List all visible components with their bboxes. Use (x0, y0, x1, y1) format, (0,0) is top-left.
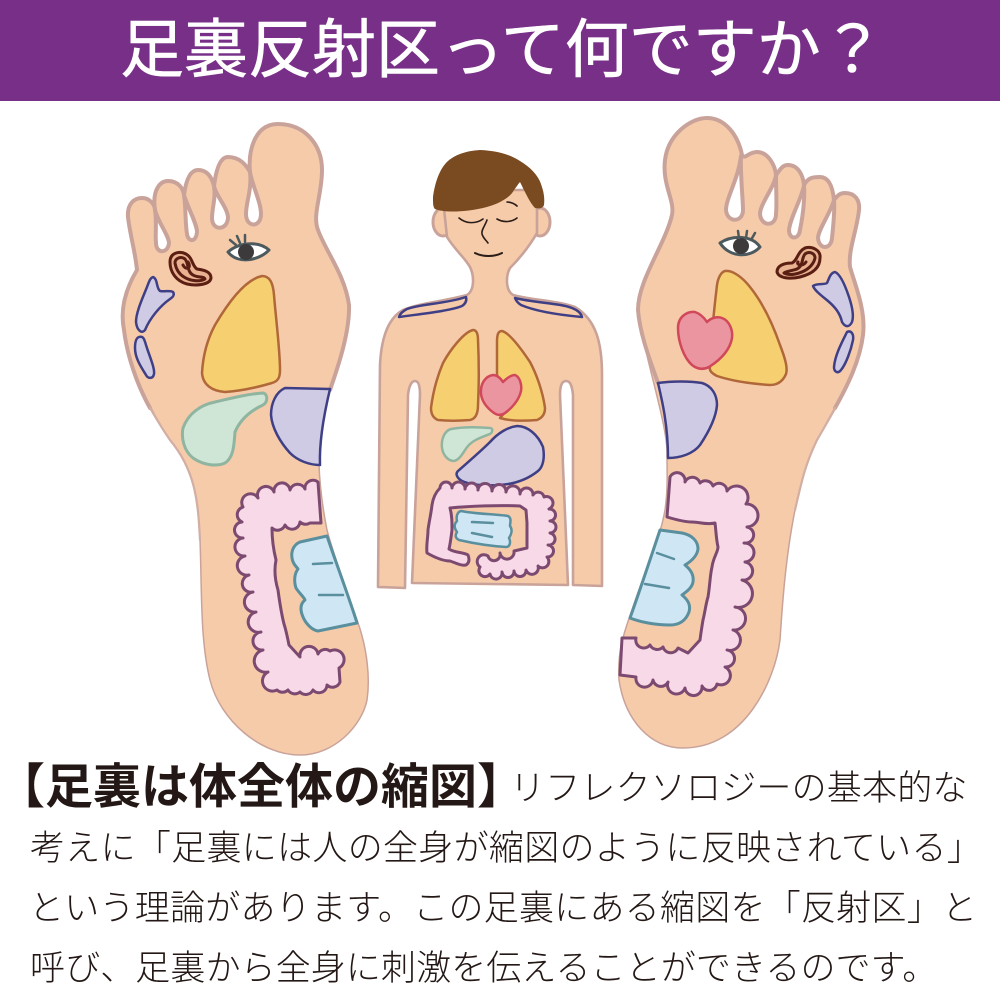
ears (433, 208, 550, 236)
colon (427, 482, 556, 579)
right foot arch contour (795, 408, 835, 510)
left thyroid (136, 277, 174, 332)
left shoulder reflex (135, 337, 154, 378)
left lung (202, 276, 280, 392)
left stomach (271, 388, 330, 465)
left foot upper contour (123, 124, 349, 408)
heart (481, 375, 521, 415)
left toe gaps (155, 172, 261, 251)
right ear (777, 247, 820, 278)
right shoulder reflex (834, 331, 853, 372)
title: 足裏反射区って何ですか？ (120, 14, 885, 86)
title banner (0, 0, 1000, 101)
right eye (720, 231, 760, 255)
left collarbone (399, 297, 466, 317)
left foot outline (123, 124, 368, 755)
text line 4: 呼び、足裏から全身に刺激を伝えることができるのです。 (30, 949, 937, 988)
right foot outline (619, 118, 864, 748)
text line 1 with bold heading: リフレクソロジーの基本的な (510, 769, 968, 808)
right heart (678, 312, 732, 369)
left ear (170, 253, 211, 285)
hair (433, 150, 544, 212)
text line 1 with bold heading (0, 761, 968, 814)
person with internal organs (378, 150, 602, 588)
text line 2: 考えに「足裏には人の全身が縮図のように反映されている」 (30, 829, 982, 868)
right lung (710, 271, 787, 385)
small intestine (455, 511, 512, 547)
right foot (619, 118, 864, 748)
text line 1 with bold heading: 【足裏は体全体の縮図】 (0, 761, 525, 814)
right toe gaps (726, 156, 834, 247)
right thyroid (813, 272, 853, 326)
right colon (620, 473, 758, 696)
face lines (459, 202, 517, 256)
stomach (457, 426, 544, 485)
right collarbone (515, 298, 582, 317)
left intestine (292, 536, 357, 631)
left colon (235, 480, 344, 694)
right lung (497, 331, 545, 421)
left foot arch contour (150, 408, 200, 540)
text line 3: という理論があります。この足裏にある縮図を「反射区」と (29, 889, 977, 928)
body outline (378, 190, 602, 588)
right stomach (658, 382, 717, 458)
left eye (228, 235, 269, 260)
left lung (431, 330, 479, 421)
explanation text (0, 761, 982, 988)
left liver (182, 393, 267, 465)
right intestine (630, 530, 698, 625)
right foot upper contour (638, 118, 864, 408)
liver (442, 427, 492, 461)
left foot (123, 124, 368, 755)
